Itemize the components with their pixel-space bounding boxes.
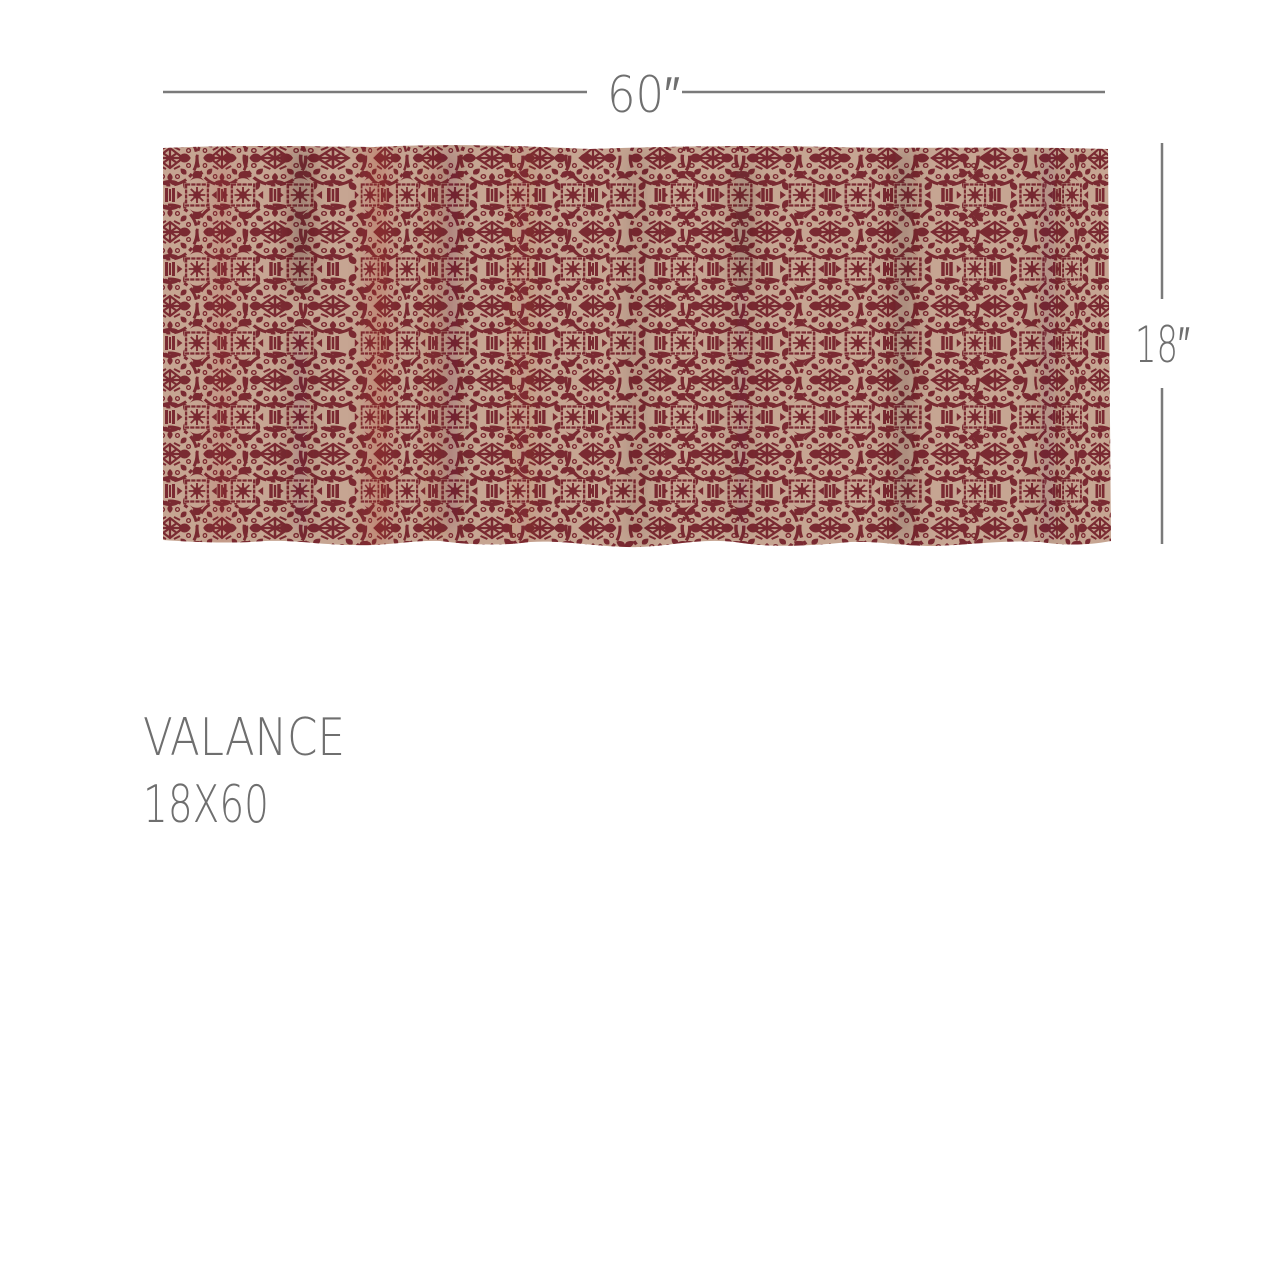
- height dimension: 18 inches: 18″: [1135, 316, 1190, 374]
- product name label: VALANCE: [143, 708, 345, 768]
- product size label: 18X60: [143, 775, 269, 835]
- valance fabric panel: [163, 145, 1111, 548]
- width dimension: 60 inches: 60″: [607, 66, 680, 124]
